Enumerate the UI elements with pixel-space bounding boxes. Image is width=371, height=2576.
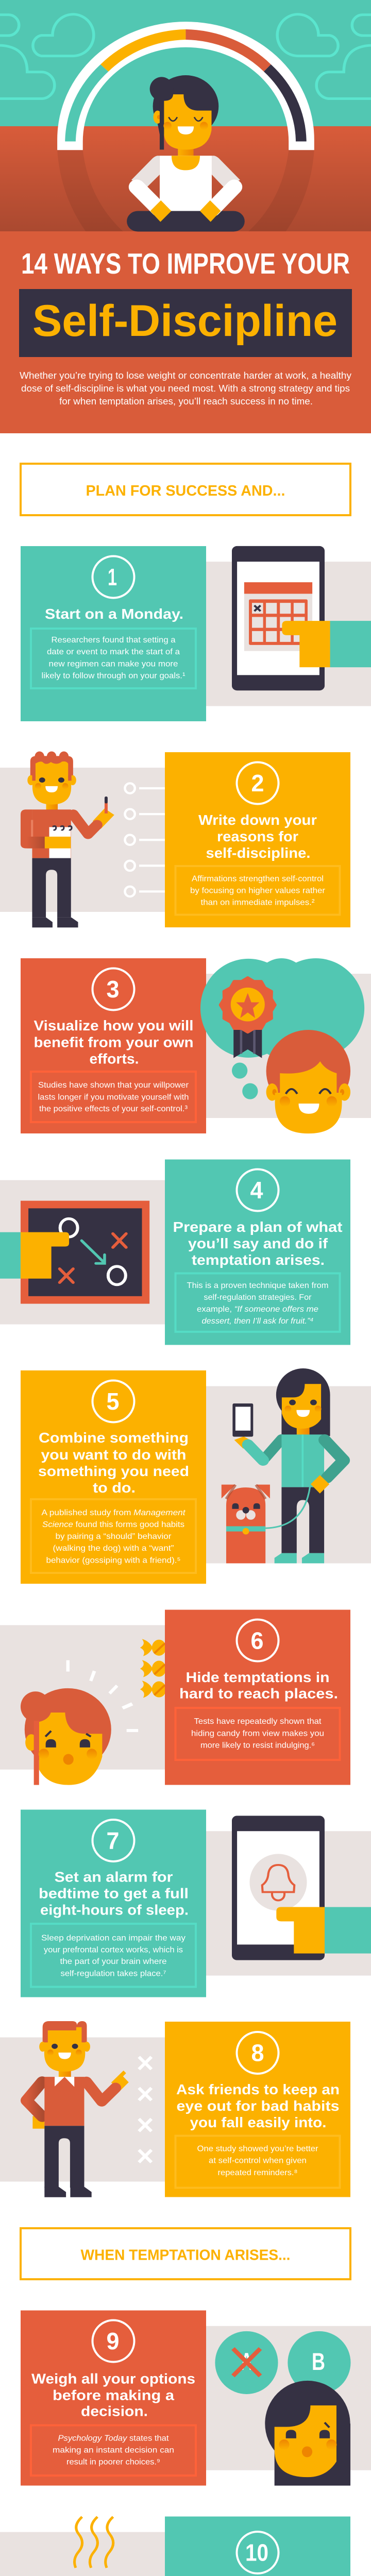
heading: reasons for xyxy=(217,828,298,844)
award ribbon xyxy=(221,978,275,1058)
heading: you fall easily into. xyxy=(190,2114,327,2130)
callout: at self-control when given xyxy=(209,2157,307,2165)
heading: temptation arises. xyxy=(192,1252,325,1268)
heading xyxy=(179,1669,338,1701)
callout: the positive effects of your self-control.³ xyxy=(39,1105,188,1113)
illustration: game plan board xyxy=(0,1180,165,1325)
heading: Write down your xyxy=(198,812,317,828)
number badge: 9 xyxy=(106,2328,120,2354)
callout xyxy=(175,2136,340,2188)
heading: you’ll say and do if xyxy=(188,1235,328,1251)
callout: by focusing on higher values rather xyxy=(190,886,326,895)
illustration: man pointing at crosses xyxy=(0,2021,165,2197)
number badge: 3 xyxy=(106,976,120,1003)
step 3 xyxy=(21,958,371,1133)
callout: making an instant decision can xyxy=(53,2446,174,2454)
callout: self-regulation takes place.⁷ xyxy=(61,1969,166,1978)
card xyxy=(21,2310,206,2485)
card xyxy=(165,1159,350,1345)
number badge: 7 xyxy=(106,1827,120,1854)
card xyxy=(21,1809,206,1997)
callout: One study showed you’re better xyxy=(197,2144,318,2154)
heading: eight-hours of sleep. xyxy=(40,1902,189,1918)
illustration: woman hiding candy xyxy=(0,1625,166,1785)
step 7 xyxy=(21,1809,371,1997)
callout: repeated reminders.⁸ xyxy=(217,2168,298,2177)
heading: Ask friends to keep an xyxy=(176,2081,340,2097)
step 4 xyxy=(0,1159,350,1345)
icon: clouds right xyxy=(277,14,371,99)
steam xyxy=(75,2517,113,2568)
intro text xyxy=(20,370,352,406)
card xyxy=(21,1370,206,1584)
number badge: 2 xyxy=(251,770,264,796)
heading: Weigh all your options xyxy=(31,2371,195,2386)
callout xyxy=(31,1499,196,1573)
option A xyxy=(233,2348,260,2376)
callout: Psychology Today states that xyxy=(58,2434,169,2443)
surprise rays xyxy=(66,1660,138,1732)
callout xyxy=(175,1274,340,1332)
step 9 xyxy=(21,2310,371,2486)
callout: likely to follow through on your goals.¹ xyxy=(41,672,185,680)
callout: Sleep deprivation can impair the way xyxy=(41,1934,185,1942)
heading xyxy=(176,2081,340,2130)
callout: the part of your brain where xyxy=(60,1957,167,1966)
woman character xyxy=(127,75,245,232)
heading: efforts. xyxy=(90,1051,139,1066)
callout: dessert, then I’ll ask for fruit.”⁴ xyxy=(202,1317,314,1326)
callout xyxy=(31,2426,196,2476)
number badge: 4 xyxy=(250,1177,263,1204)
number badge xyxy=(237,2032,278,2074)
step 5 xyxy=(21,1368,371,1584)
heading: Set an alarm for xyxy=(55,1869,173,1885)
panel: hero header xyxy=(0,0,371,433)
illustration: woman walking dog with phone xyxy=(206,1368,371,1563)
step 2 xyxy=(0,751,350,927)
option B: B xyxy=(312,2348,325,2375)
heading: Start on a Monday. xyxy=(45,606,183,622)
callout: example, “If someone offers me xyxy=(197,1305,318,1314)
title banner: Self-Discipline xyxy=(32,296,338,346)
thought cloud xyxy=(200,958,364,1099)
callout: date or event to mark the start of a xyxy=(47,648,180,656)
intro text: dose of self-discipline is what you need most. With a strong strategy and tips xyxy=(21,383,350,394)
woman character xyxy=(234,1368,344,1563)
heading: Combine something xyxy=(39,1430,189,1446)
crosses xyxy=(139,2057,151,2162)
callout: self-regulation strategies. For xyxy=(204,1293,312,1302)
woman face xyxy=(21,1688,111,1785)
callout: new regimen can make you more xyxy=(48,659,178,669)
callout: A published study from Management xyxy=(41,1509,185,1517)
callout xyxy=(175,866,340,915)
callout: This is a proven technique taken from xyxy=(187,1281,329,1290)
number badge xyxy=(93,2320,134,2362)
number badge xyxy=(93,969,134,1010)
callout: lasts longer if you motivate yourself with xyxy=(38,1093,189,1101)
step 8 xyxy=(0,2021,350,2197)
step 1 xyxy=(21,546,371,721)
heading: self-discipline. xyxy=(206,845,310,861)
callout: result in poorer choices.⁹ xyxy=(66,2458,160,2467)
illustration: phone alarm bell xyxy=(206,1816,371,1976)
heading xyxy=(31,2371,195,2419)
gauge arch xyxy=(57,22,314,150)
callout: behavior (gossiping with a friend).⁵ xyxy=(46,1556,180,1565)
illustration: meditating woman under gauge xyxy=(0,14,371,232)
heading: when temptation arises: WHEN TEMPTATION ARISES... xyxy=(80,2247,291,2264)
number badge: 8 xyxy=(251,2039,264,2066)
callout: your prefrontal cortex works, which is xyxy=(44,1945,183,1955)
icon: phone xyxy=(232,1403,253,1437)
illustration: phone calendar xyxy=(206,546,371,706)
heading xyxy=(39,1869,189,1918)
heading: Hide temptations in xyxy=(185,1669,330,1685)
number badge xyxy=(237,1620,278,1661)
man character xyxy=(26,2021,129,2197)
number badge: 10 xyxy=(245,2539,268,2566)
heading: plan for success xyxy=(21,464,350,515)
callout: (walking the dog) with a “want” xyxy=(53,1544,174,1553)
number badge xyxy=(93,1820,134,1861)
number badge xyxy=(93,1381,134,1422)
number badge: 6 xyxy=(250,1627,264,1654)
illustration: man with checklist xyxy=(0,751,165,927)
card xyxy=(21,546,206,721)
callout: than on immediate impulses.² xyxy=(201,899,315,907)
heading: bedtime to get a full xyxy=(39,1886,189,1901)
heading: you want to do with xyxy=(41,1447,187,1463)
checklist xyxy=(125,783,165,896)
callout: Researchers found that setting a xyxy=(52,636,176,645)
callout: hiding candy from view makes you xyxy=(191,1729,324,1738)
heading xyxy=(198,812,317,861)
callout xyxy=(175,1708,340,1760)
callout: Tests have repeatedly shown that xyxy=(194,1717,322,1726)
heading: benefit from your own xyxy=(34,1035,194,1050)
candies xyxy=(140,1639,166,1698)
card xyxy=(165,2516,350,2576)
heading xyxy=(38,1430,189,1496)
number badge xyxy=(237,2532,278,2573)
number badge: 1 xyxy=(108,564,117,590)
illustration: woman choosing options xyxy=(206,2326,371,2470)
callout xyxy=(31,1924,196,1987)
callout: Science found this forms good habits xyxy=(42,1520,184,1529)
heading: before making a xyxy=(53,2387,174,2403)
callout: Affirmations strengthen self-control xyxy=(192,875,324,883)
boy face xyxy=(266,1030,350,1133)
intro text: Whether you’re trying to lose weight or concentrate harder at work, a healthy xyxy=(20,370,352,381)
man character xyxy=(21,751,114,927)
heading: decision. xyxy=(81,2403,148,2419)
step 10 xyxy=(0,2516,350,2576)
heading: Prepare a plan of what xyxy=(173,1219,342,1235)
heading: hard to reach places. xyxy=(179,1686,338,1701)
heading: eye out for bad habits xyxy=(176,2098,339,2114)
number badge xyxy=(237,1170,278,1211)
callout xyxy=(31,1072,196,1122)
heading: something you need xyxy=(38,1463,189,1479)
dog xyxy=(222,1485,310,1563)
heading: Visualize how you will xyxy=(34,1018,194,1033)
callout: more likely to resist indulging.⁶ xyxy=(200,1741,315,1750)
woman face xyxy=(265,2381,350,2486)
step 6 xyxy=(0,1609,350,1785)
callout: Studies have shown that your willpower xyxy=(38,1081,189,1090)
callout: by pairing a “should” behavior xyxy=(56,1532,172,1541)
title banner xyxy=(19,289,352,357)
option A: A xyxy=(240,2348,252,2375)
heading xyxy=(173,1219,342,1268)
heading xyxy=(34,1018,194,1066)
intro text: for when temptation arises, you’ll reach success in no time. xyxy=(59,396,313,406)
callout xyxy=(31,629,196,688)
number badge xyxy=(93,556,134,598)
illustration: hot mug xyxy=(0,2517,165,2576)
card xyxy=(165,1609,350,1785)
heading: plan for success: PLAN FOR SUCCESS AND... xyxy=(86,483,285,499)
card xyxy=(165,752,350,927)
card xyxy=(165,2022,350,2197)
icon: clouds left xyxy=(0,14,94,99)
number badge xyxy=(237,762,278,804)
illustration: boy dreaming of award xyxy=(200,958,364,1133)
number badge: 5 xyxy=(106,1388,120,1415)
heading: to do. xyxy=(93,1480,136,1496)
heading: when temptation arises xyxy=(21,2228,350,2279)
card xyxy=(21,958,206,1133)
